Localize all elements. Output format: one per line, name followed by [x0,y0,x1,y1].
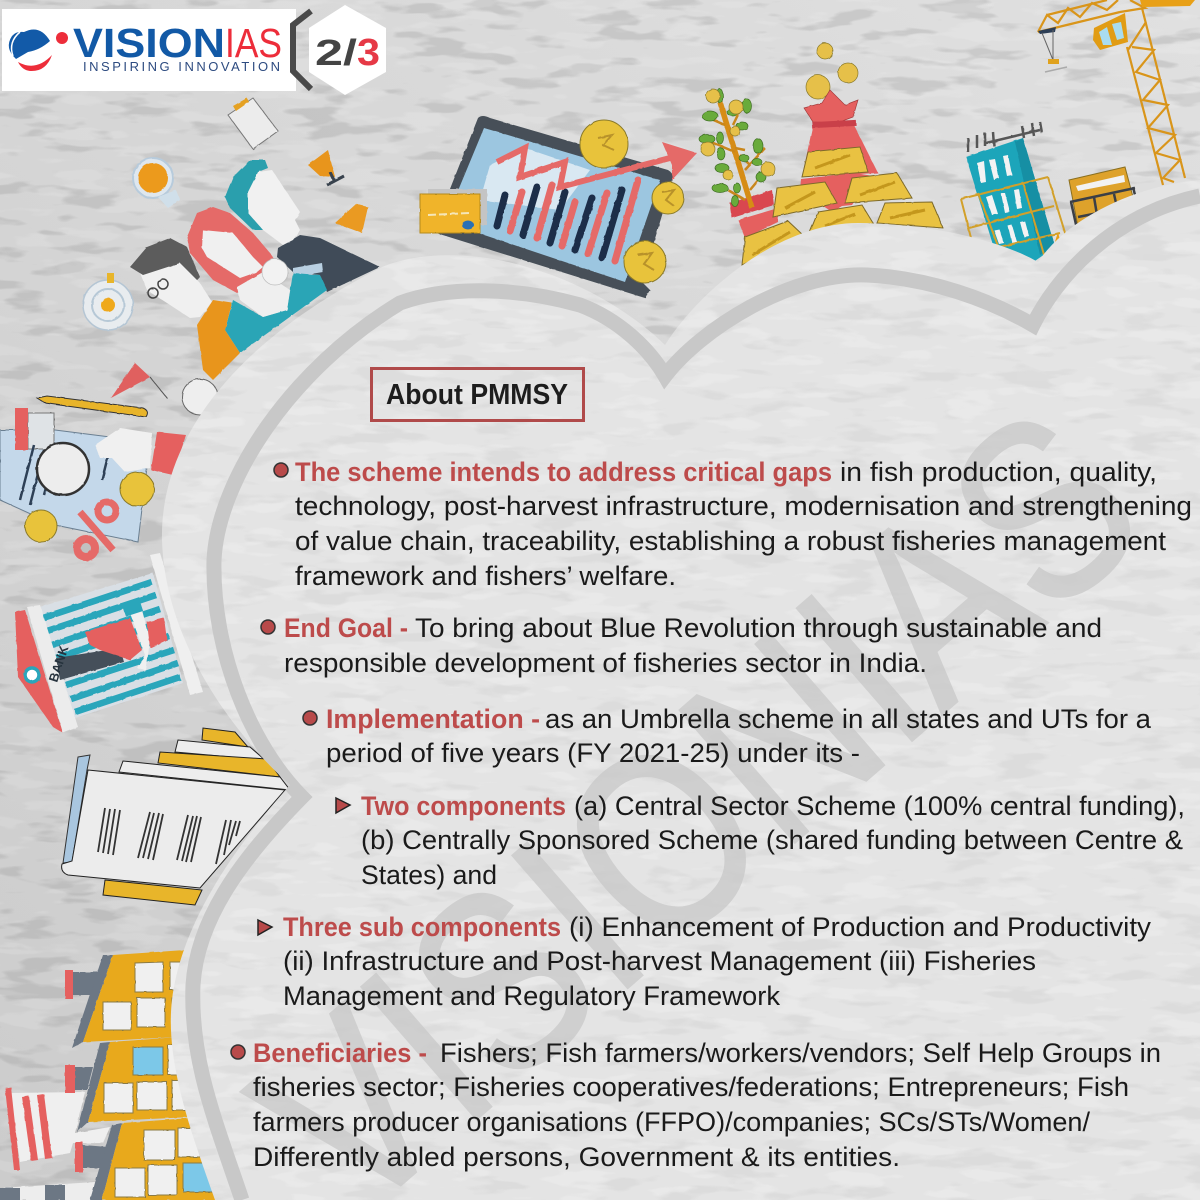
bullet: beneficiaries: farmers producer organisations (FFPO)/companies; SCs/STs/Women/ [253,1107,1090,1137]
bullet: critical gaps: technology, post-harvest infrastructure, modernisation and strengthening [295,491,1192,521]
bullet: end goal: To bring about Blue Revolution through sustainable and [415,613,1102,643]
bullet: beneficiaries [231,1038,1161,1172]
sub-bullet: three sub components: (ii) Infrastructure and Post-harvest Management (iii) Fisheries [283,946,1036,976]
bullet: end goal: responsible development of fisheries sector in India. [284,648,927,678]
bullet: implementation: as an Umbrella scheme in all states and UTs for a [545,704,1152,734]
illustration: bank building [15,553,203,733]
bullet: beneficiaries: Beneficiaries - [253,1038,427,1068]
bullet: critical gaps: of value chain, traceability, establishing a robust fisheries management [295,526,1167,556]
cloud panel [162,180,1200,1200]
bullet: end goal [261,613,1102,678]
bullet: beneficiaries: fisheries sector; Fisheries cooperatives/federations; Entrepreneurs; Fish [253,1072,1129,1102]
logo: VISION IAS globe [9,29,68,71]
sub-bullet: two components: (b) Centrally Sponsored Scheme (shared funding between Centre & [361,825,1183,855]
wordmark IAS: IAS [225,20,282,66]
bullet: beneficiaries: Fishers; Fish farmers/workers/vendors; Self Help Groups in [440,1038,1161,1068]
bullet: critical gaps [274,457,1192,591]
heading: About PMMSY [372,368,584,420]
bullet: critical gaps: in fish production, quality, [840,457,1157,487]
brace and hexagon page counter: 2/ [315,32,357,73]
tagline: INSPIRING INNOVATION [83,59,280,74]
illustration: yellow buildings with balconies [0,950,220,1200]
brace and hexagon page counter [293,5,386,95]
sub-bullet: two components [336,791,1185,890]
illustration: tower block and scaffold [961,122,1066,263]
small icons: clipboard, bulb, trophy, gem, target, flag, clock [83,98,368,415]
sub-bullet: three sub components: (i) Enhancement of Production and Productivity [569,912,1152,942]
bullet: implementation: period of five years (FY 2021-25) under its - [326,738,860,768]
sub-bullet: two components: (a) Central Sector Scheme (100% central funding), [574,791,1185,821]
sub-bullet: three sub components: Management and Regulatory Framework [283,981,781,1011]
sub-bullet: three sub components [258,912,1152,1011]
illustration: gold bars, money bag and money plant [699,43,943,265]
header: white logo strip [2,9,296,91]
bullet: end goal: End Goal - [284,613,408,643]
illustration: team of three people [130,160,380,380]
illustration: bank building: BANK [46,643,72,684]
brace and hexagon page counter: 3 [357,32,380,74]
wordmark: VISION [73,20,225,66]
illustration: stacked documents [62,728,290,905]
bullet: critical gaps: framework and fishers’ welfare. [295,561,676,591]
sub-bullet: two components: Two components [361,791,566,821]
illustration: laptop chart with rupee coins [420,116,697,298]
bullet: critical gaps: The scheme intends to address critical gaps [295,457,832,487]
illustration: construction crane and boxed site [1038,0,1195,229]
sub-bullet: two components: States) and [361,860,497,890]
illustration: tax document with hand, coins and percent [0,396,186,557]
sub-bullet: three sub components: Three sub components [283,912,561,942]
bullet: beneficiaries: Differently abled persons, Government & its entities. [253,1142,900,1172]
bullet: implementation [303,704,1152,768]
bullet: implementation: Implementation - [326,704,540,734]
heading: About PMMSY: About PMMSY [386,379,568,411]
